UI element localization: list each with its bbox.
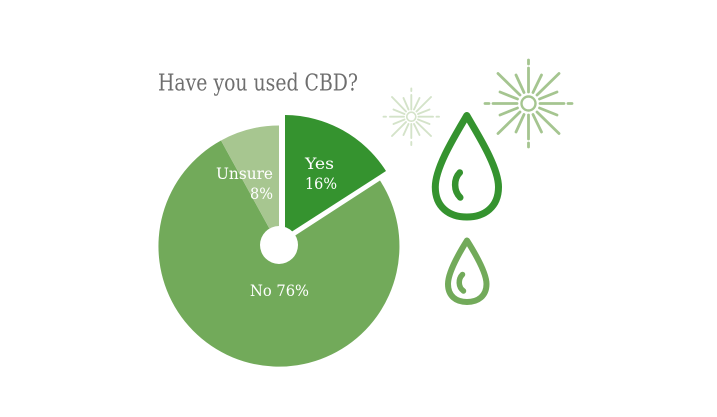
pie chart [158, 115, 399, 367]
label: Unsure: Unsure [216, 165, 273, 183]
icon: large drop [435, 116, 498, 217]
centre hole [260, 226, 298, 264]
slice: No 76% [158, 140, 399, 367]
slice: Unsure 8% [221, 126, 279, 246]
icon: small sparkle [384, 88, 439, 145]
label: Unsure value: 8% [250, 185, 273, 203]
icon: large sparkle [485, 60, 572, 147]
label: Yes: Yes [304, 155, 334, 173]
slice: Yes 16% [285, 115, 386, 236]
label: No value: No 76% [250, 282, 309, 300]
icon: small drop [448, 240, 486, 302]
title: Have you used CBD? [158, 70, 358, 96]
label: Yes value: 16% [305, 175, 337, 193]
